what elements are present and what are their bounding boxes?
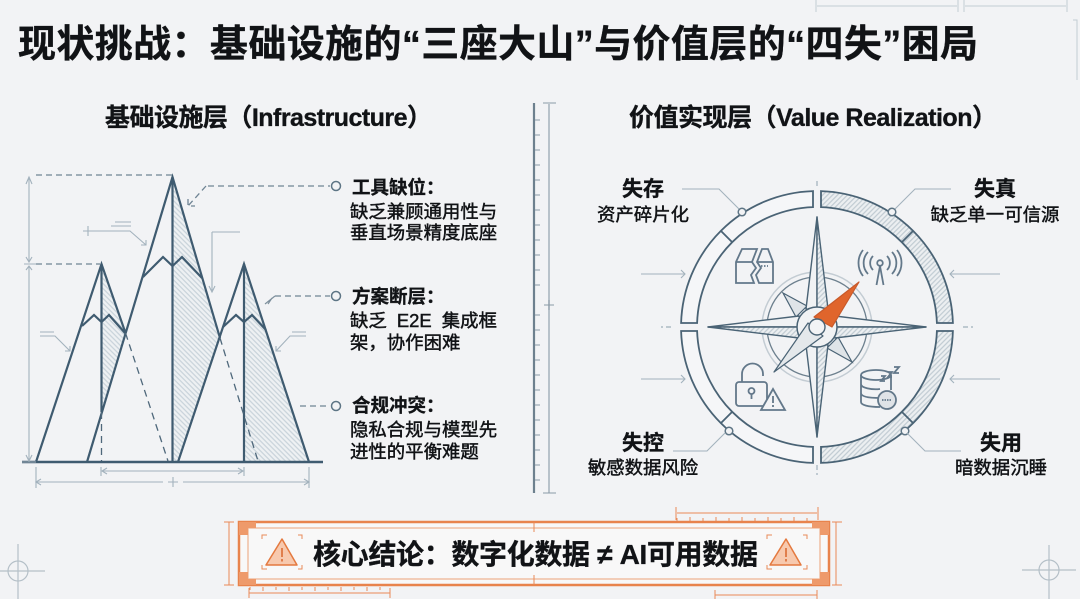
heading: infrastructure layer: 基础设施层（Infrastructure） [105,104,432,132]
callout: tool gap [350,177,497,243]
ring dividers [721,231,913,423]
needle [774,282,859,372]
top right dimension marks [816,0,1077,80]
callout: solution gap [350,286,497,353]
banner dimension lines [224,507,842,599]
axis ticks [661,181,973,475]
callout: solution gap: 架，协作困难 [350,332,460,353]
hub [797,307,837,347]
label: 失用: 失用 [980,432,1022,455]
label: 失存 [597,178,689,225]
leader lines [208,182,340,410]
callout: tool gap: 工具缺位： [352,177,445,198]
icon: broken box [736,249,773,283]
hatched mountain faces [102,177,309,462]
crosshair bottom right [1022,545,1076,599]
compass diagram [661,181,973,475]
label: 失真 [931,178,1059,225]
height dimensions [22,177,36,462]
hidden dashed edges [102,333,258,462]
ring: right quadrants hatched [821,191,953,463]
callout: compliance conflict: 合规冲突： [352,395,445,416]
icon: open lock with warning [736,364,785,410]
corner blocks [239,522,829,585]
title: 现状挑战：基础设施的“三座大山”与价值层的“四失”困局 [18,24,978,66]
warning icon right [767,535,807,569]
callout: solution gap: 缺乏 E2E 集成框 [350,310,497,331]
right mountain [178,264,309,462]
callout: tool gap: 垂直场景精度底座 [350,222,497,243]
center ruler [534,103,556,493]
label: 失用: 暗数据沉睡 [955,457,1047,478]
hub cap [809,319,825,335]
crosshair bottom left [0,544,45,599]
callout: compliance conflict: 进性的平衡难题 [350,441,479,462]
heading: value realization layer: 价值实现层（Value Realization） [629,104,997,132]
label: 失真: 缺乏单一可信源 [931,204,1059,225]
label: 失存: 失存 [622,178,664,201]
left mountain [36,264,126,462]
connector lines for compass labels [641,189,1000,451]
ring: left quadrants [681,191,813,463]
callout: compliance conflict: 隐私合规与模型先 [350,419,497,440]
width dimensions [36,467,309,488]
minor star points [783,293,852,362]
ring nodes [725,208,909,435]
callout: solution gap: 方案断层： [352,286,445,307]
label: 失用 [955,432,1047,478]
middle mountain [87,177,220,462]
label: 失控 [588,432,698,478]
conclusion text: 核心结论：数字化数据 ≠ AI可用数据 [313,539,758,570]
label: 失控: 失控 [622,432,664,455]
warning icon left [262,535,302,569]
label: 失真: 失真 [974,178,1016,201]
conclusion banner [224,507,842,599]
icon: signal antenna [858,250,902,285]
icon: sleeping database [861,367,899,409]
pointer arrows [40,222,306,351]
label: 失控: 敏感数据风险 [588,457,698,478]
callout: compliance conflict [350,395,497,462]
mountains diagram [22,175,323,488]
banner frame [239,522,829,585]
major star points [708,217,926,437]
callout: tool gap: 缺乏兼顾通用性与 [350,201,497,222]
label: 失存: 资产碎片化 [597,204,689,225]
inner circles [762,272,872,382]
ground line [22,461,323,463]
